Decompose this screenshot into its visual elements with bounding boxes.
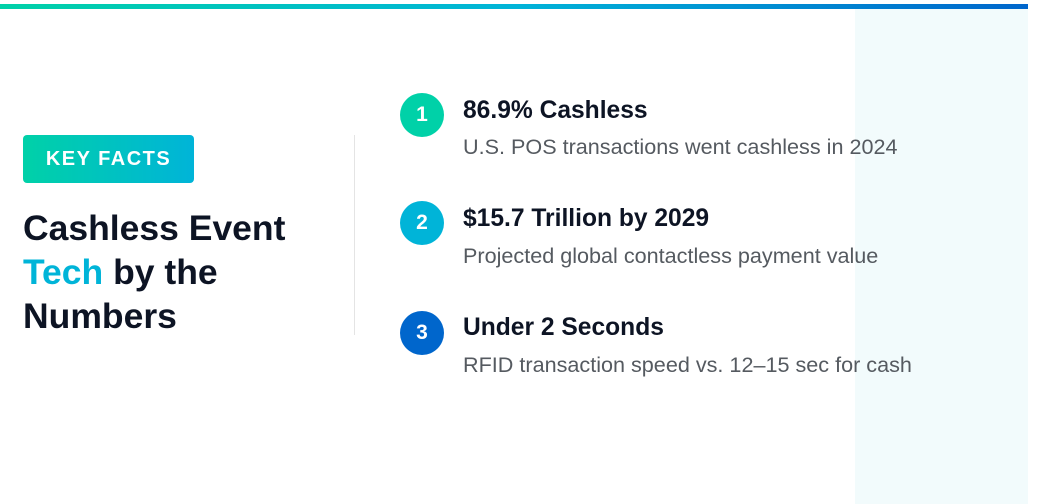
fact 2 <box>400 201 878 268</box>
divider <box>354 135 355 335</box>
right light panel <box>855 9 1028 504</box>
badge: key facts <box>23 135 194 183</box>
top gradient bar <box>0 4 1028 9</box>
title: Numbers <box>23 296 177 336</box>
icon: number 1: 1 <box>416 103 428 126</box>
title <box>23 208 285 336</box>
title: Cashless Event <box>23 208 285 248</box>
icon: number 2 <box>400 201 444 245</box>
heading 1: 86.9% Cashless <box>463 97 648 124</box>
heading 3: Under 2 Seconds <box>463 314 664 341</box>
badge: key facts: KEY FACTS <box>46 148 171 170</box>
text 1: U.S. POS transactions went cashless in 2024 <box>463 134 898 159</box>
icon: number 3 <box>400 311 444 355</box>
title: Tech by the <box>23 252 218 292</box>
icon: number 3: 3 <box>416 321 428 344</box>
heading 2: $15.7 Trillion by 2029 <box>463 205 709 232</box>
text 2: Projected global contactless payment value <box>463 243 878 268</box>
fact 3 <box>400 311 912 377</box>
text 3: RFID transaction speed vs. 12–15 sec for cash <box>463 352 912 377</box>
icon: number 2: 2 <box>416 211 428 234</box>
fact 1 <box>400 93 898 159</box>
icon: number 1 <box>400 93 444 137</box>
